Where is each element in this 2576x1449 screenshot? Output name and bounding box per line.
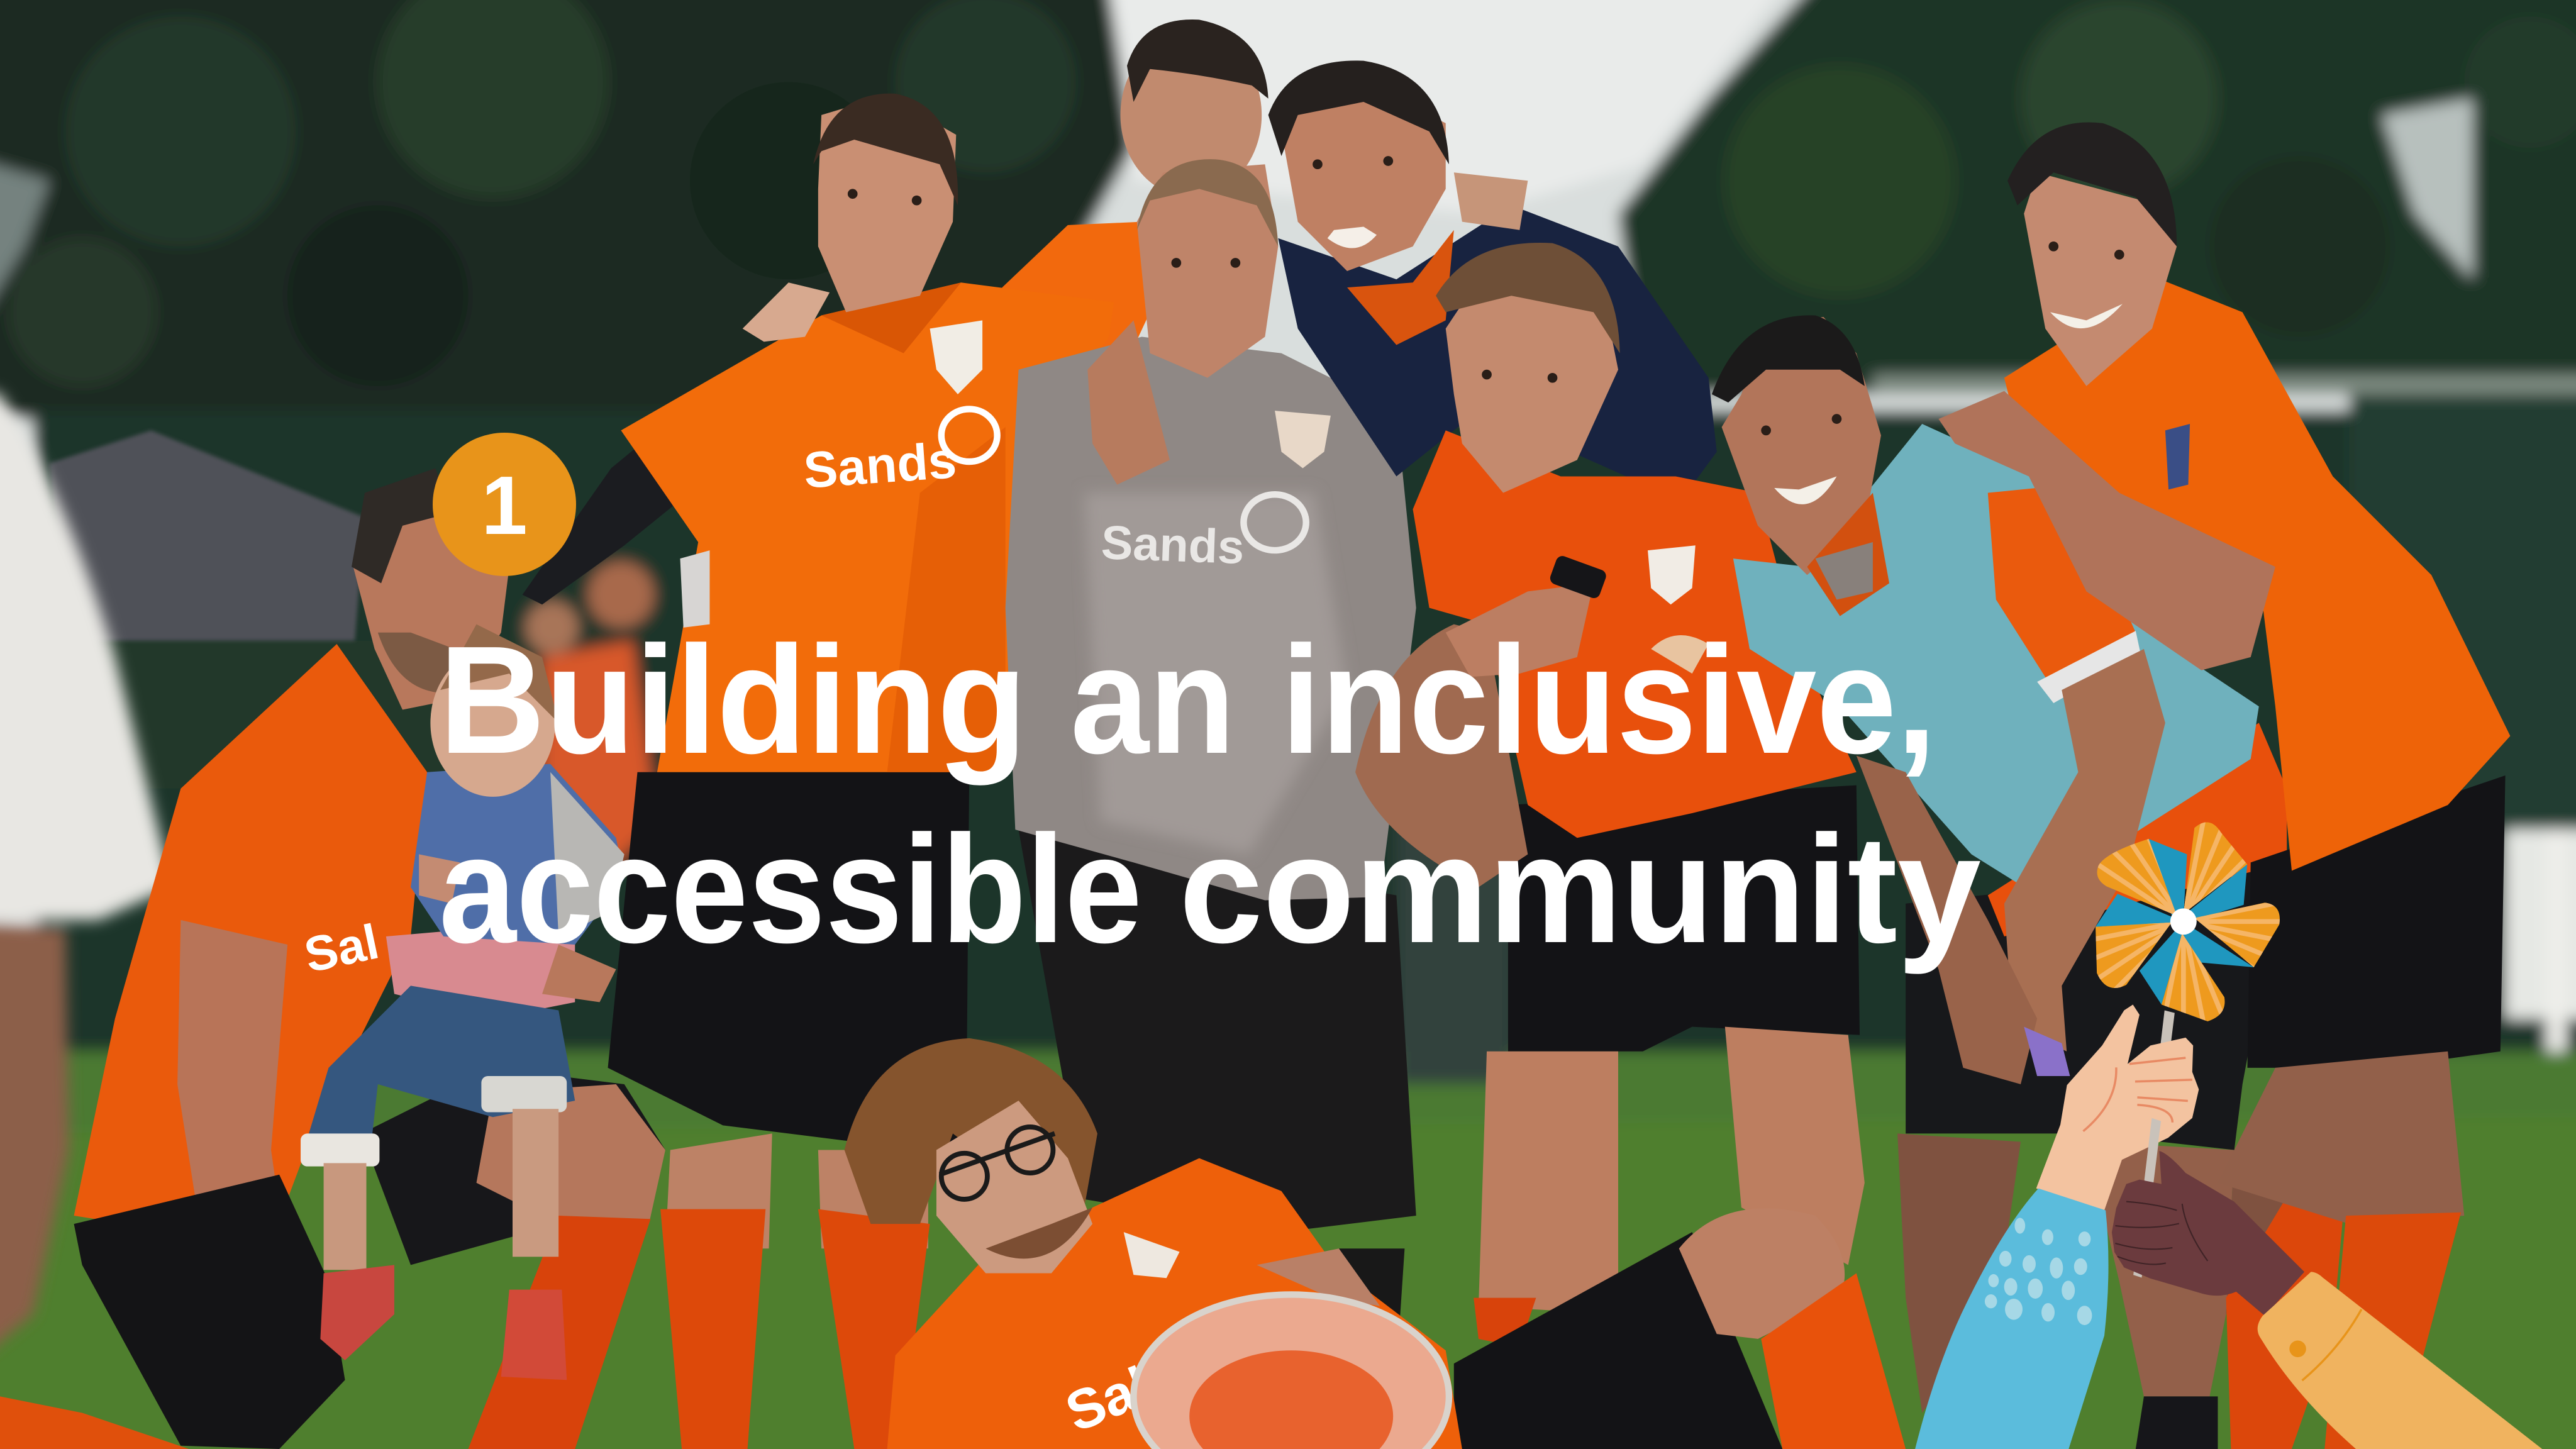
player: navy jacket on shoulders xyxy=(1269,60,1717,575)
player: back row with dark hair xyxy=(994,19,1269,674)
player: orange shirt, far right xyxy=(1938,122,2510,1449)
icon: yellow sleeve with button xyxy=(2258,1272,2576,1449)
icon: light-skinned hand xyxy=(2036,1004,2199,1211)
player: teal bib with orange shirt xyxy=(1712,315,2346,1449)
title xyxy=(439,614,1981,975)
icon: stick lower section xyxy=(2145,1118,2161,1182)
player: orange shirt, centre left xyxy=(523,94,1114,1449)
gazebo in background xyxy=(49,430,365,641)
icon: dark-skinned hand xyxy=(2112,1151,2304,1316)
title: an xyxy=(1070,614,1235,786)
icon: blue patterned sleeve xyxy=(1909,1189,2109,1449)
player: grey shirt, centre: Sands xyxy=(1101,516,1245,574)
player: left kneeling with child xyxy=(0,468,665,1449)
player: left kneeling with child: Sal xyxy=(299,914,384,983)
player: orange shirt, blond hair xyxy=(1355,243,1865,1347)
foreground blurred shoulder at left edge xyxy=(0,378,172,1396)
player: grey shirt, centre xyxy=(1006,159,1416,1323)
number badge xyxy=(433,433,576,576)
player: reclining in front with trophy xyxy=(845,1038,1906,1449)
number badge: 1 xyxy=(481,459,528,552)
toddler in blue cardigan xyxy=(301,625,625,1380)
player: orange shirt, centre left: Sands xyxy=(802,432,958,499)
title: inclusive, xyxy=(1281,614,1936,786)
icon: pinwheel xyxy=(2096,823,2280,1021)
icon: pinwheel stick xyxy=(2133,1010,2175,1277)
player: reclining in front with trophy: Sal xyxy=(1057,1355,1158,1443)
illustration: two hands holding a pinwheel xyxy=(1909,795,2576,1449)
title: Building xyxy=(439,614,1027,786)
title: accessible xyxy=(439,803,1142,975)
title: community xyxy=(1179,803,1981,975)
